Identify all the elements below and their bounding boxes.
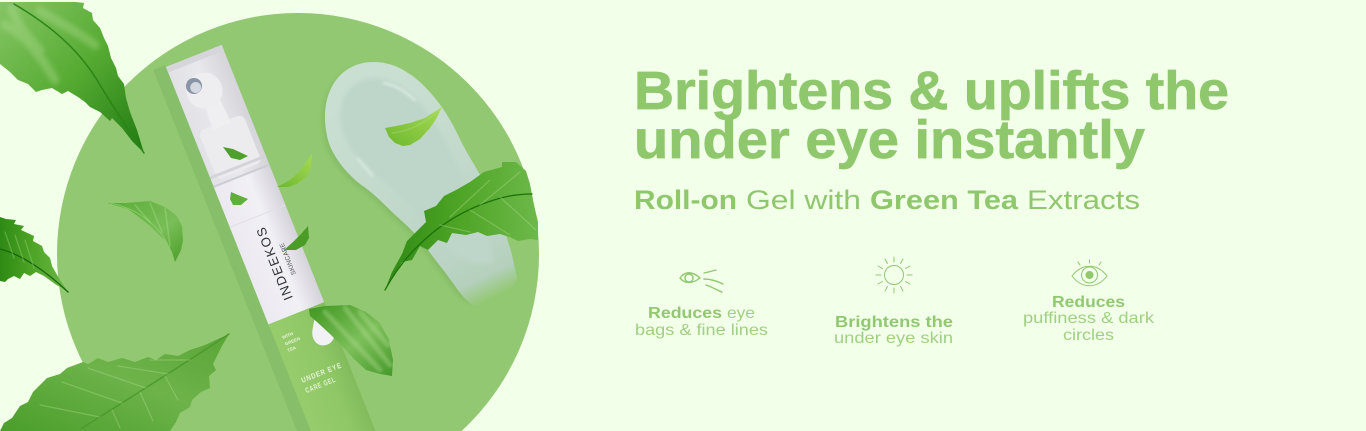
product tube bbox=[153, 45, 376, 431]
leaf: bottom left bbox=[0, 334, 229, 431]
leaf: small centre bbox=[107, 201, 183, 262]
text: brightens bbox=[834, 314, 953, 347]
text: brightens: Brightens the bbox=[835, 314, 953, 331]
text: eye bags: eye bbox=[727, 305, 755, 322]
leaf: under gel right bbox=[385, 162, 538, 290]
leaf: tube label bbox=[284, 226, 309, 250]
leaf: lime right of tube bbox=[277, 154, 312, 187]
text: puffiness: circles bbox=[1063, 327, 1114, 344]
green circle bbox=[57, 13, 539, 431]
roller applicator bbox=[173, 62, 270, 188]
text: puffiness: Reduces bbox=[1052, 294, 1125, 311]
green tube copy: CARE GEL bbox=[304, 375, 337, 395]
tube shadow bbox=[153, 65, 311, 431]
green tube copy: WITH bbox=[281, 331, 294, 340]
white drop bbox=[305, 310, 338, 349]
heading: under eye instantly bbox=[634, 110, 1145, 170]
icon: open eye bbox=[1072, 260, 1107, 286]
leaf: top left bbox=[0, 2, 144, 153]
white tube body bbox=[214, 166, 324, 324]
text: puffiness: puffiness & dark bbox=[1023, 310, 1155, 327]
gel inner shading bbox=[340, 78, 494, 264]
subheading: Gel with bbox=[746, 185, 861, 215]
gel swatch bbox=[322, 62, 517, 307]
leaf: on gel bbox=[385, 107, 442, 146]
green tube copy bbox=[281, 319, 347, 396]
clear cap bbox=[166, 45, 270, 188]
brand subline: SKINCARE bbox=[279, 241, 298, 276]
icon: eye with lines bbox=[680, 270, 723, 292]
text: eye bags: bags & fine lines bbox=[635, 322, 768, 339]
green tube copy: GREEN bbox=[284, 336, 301, 346]
heading bbox=[634, 61, 1229, 170]
benefit: eye bags bbox=[635, 270, 768, 339]
leaf: mid left bbox=[0, 217, 68, 292]
leaf: large over tube bbox=[309, 305, 393, 376]
subheading: Roll-on bbox=[634, 185, 737, 215]
leaf: tube middle bbox=[230, 192, 248, 205]
tube upper body bbox=[166, 45, 324, 324]
icon: sun bbox=[876, 257, 912, 293]
benefit: puffiness bbox=[1023, 260, 1155, 344]
green tube copy: UNDER EYE bbox=[300, 361, 343, 385]
text: eye bags: Reduces bbox=[648, 305, 722, 322]
text: eye bags bbox=[635, 305, 768, 339]
benefit: brightens bbox=[834, 257, 953, 347]
brand name: INDEEKOS bbox=[253, 225, 296, 302]
subheading: Green Tea bbox=[870, 185, 1019, 215]
heading: Brightens & uplifts the bbox=[634, 61, 1229, 121]
subheading bbox=[634, 185, 1140, 215]
gel highlights bbox=[358, 83, 415, 175]
leaf: tube upper bbox=[223, 147, 248, 160]
green tube label bbox=[268, 302, 376, 431]
subheading: Extracts bbox=[1027, 185, 1140, 215]
text: puffiness bbox=[1023, 294, 1155, 344]
green tube copy: TEA bbox=[287, 345, 297, 353]
text: brightens: under eye skin bbox=[834, 330, 953, 347]
